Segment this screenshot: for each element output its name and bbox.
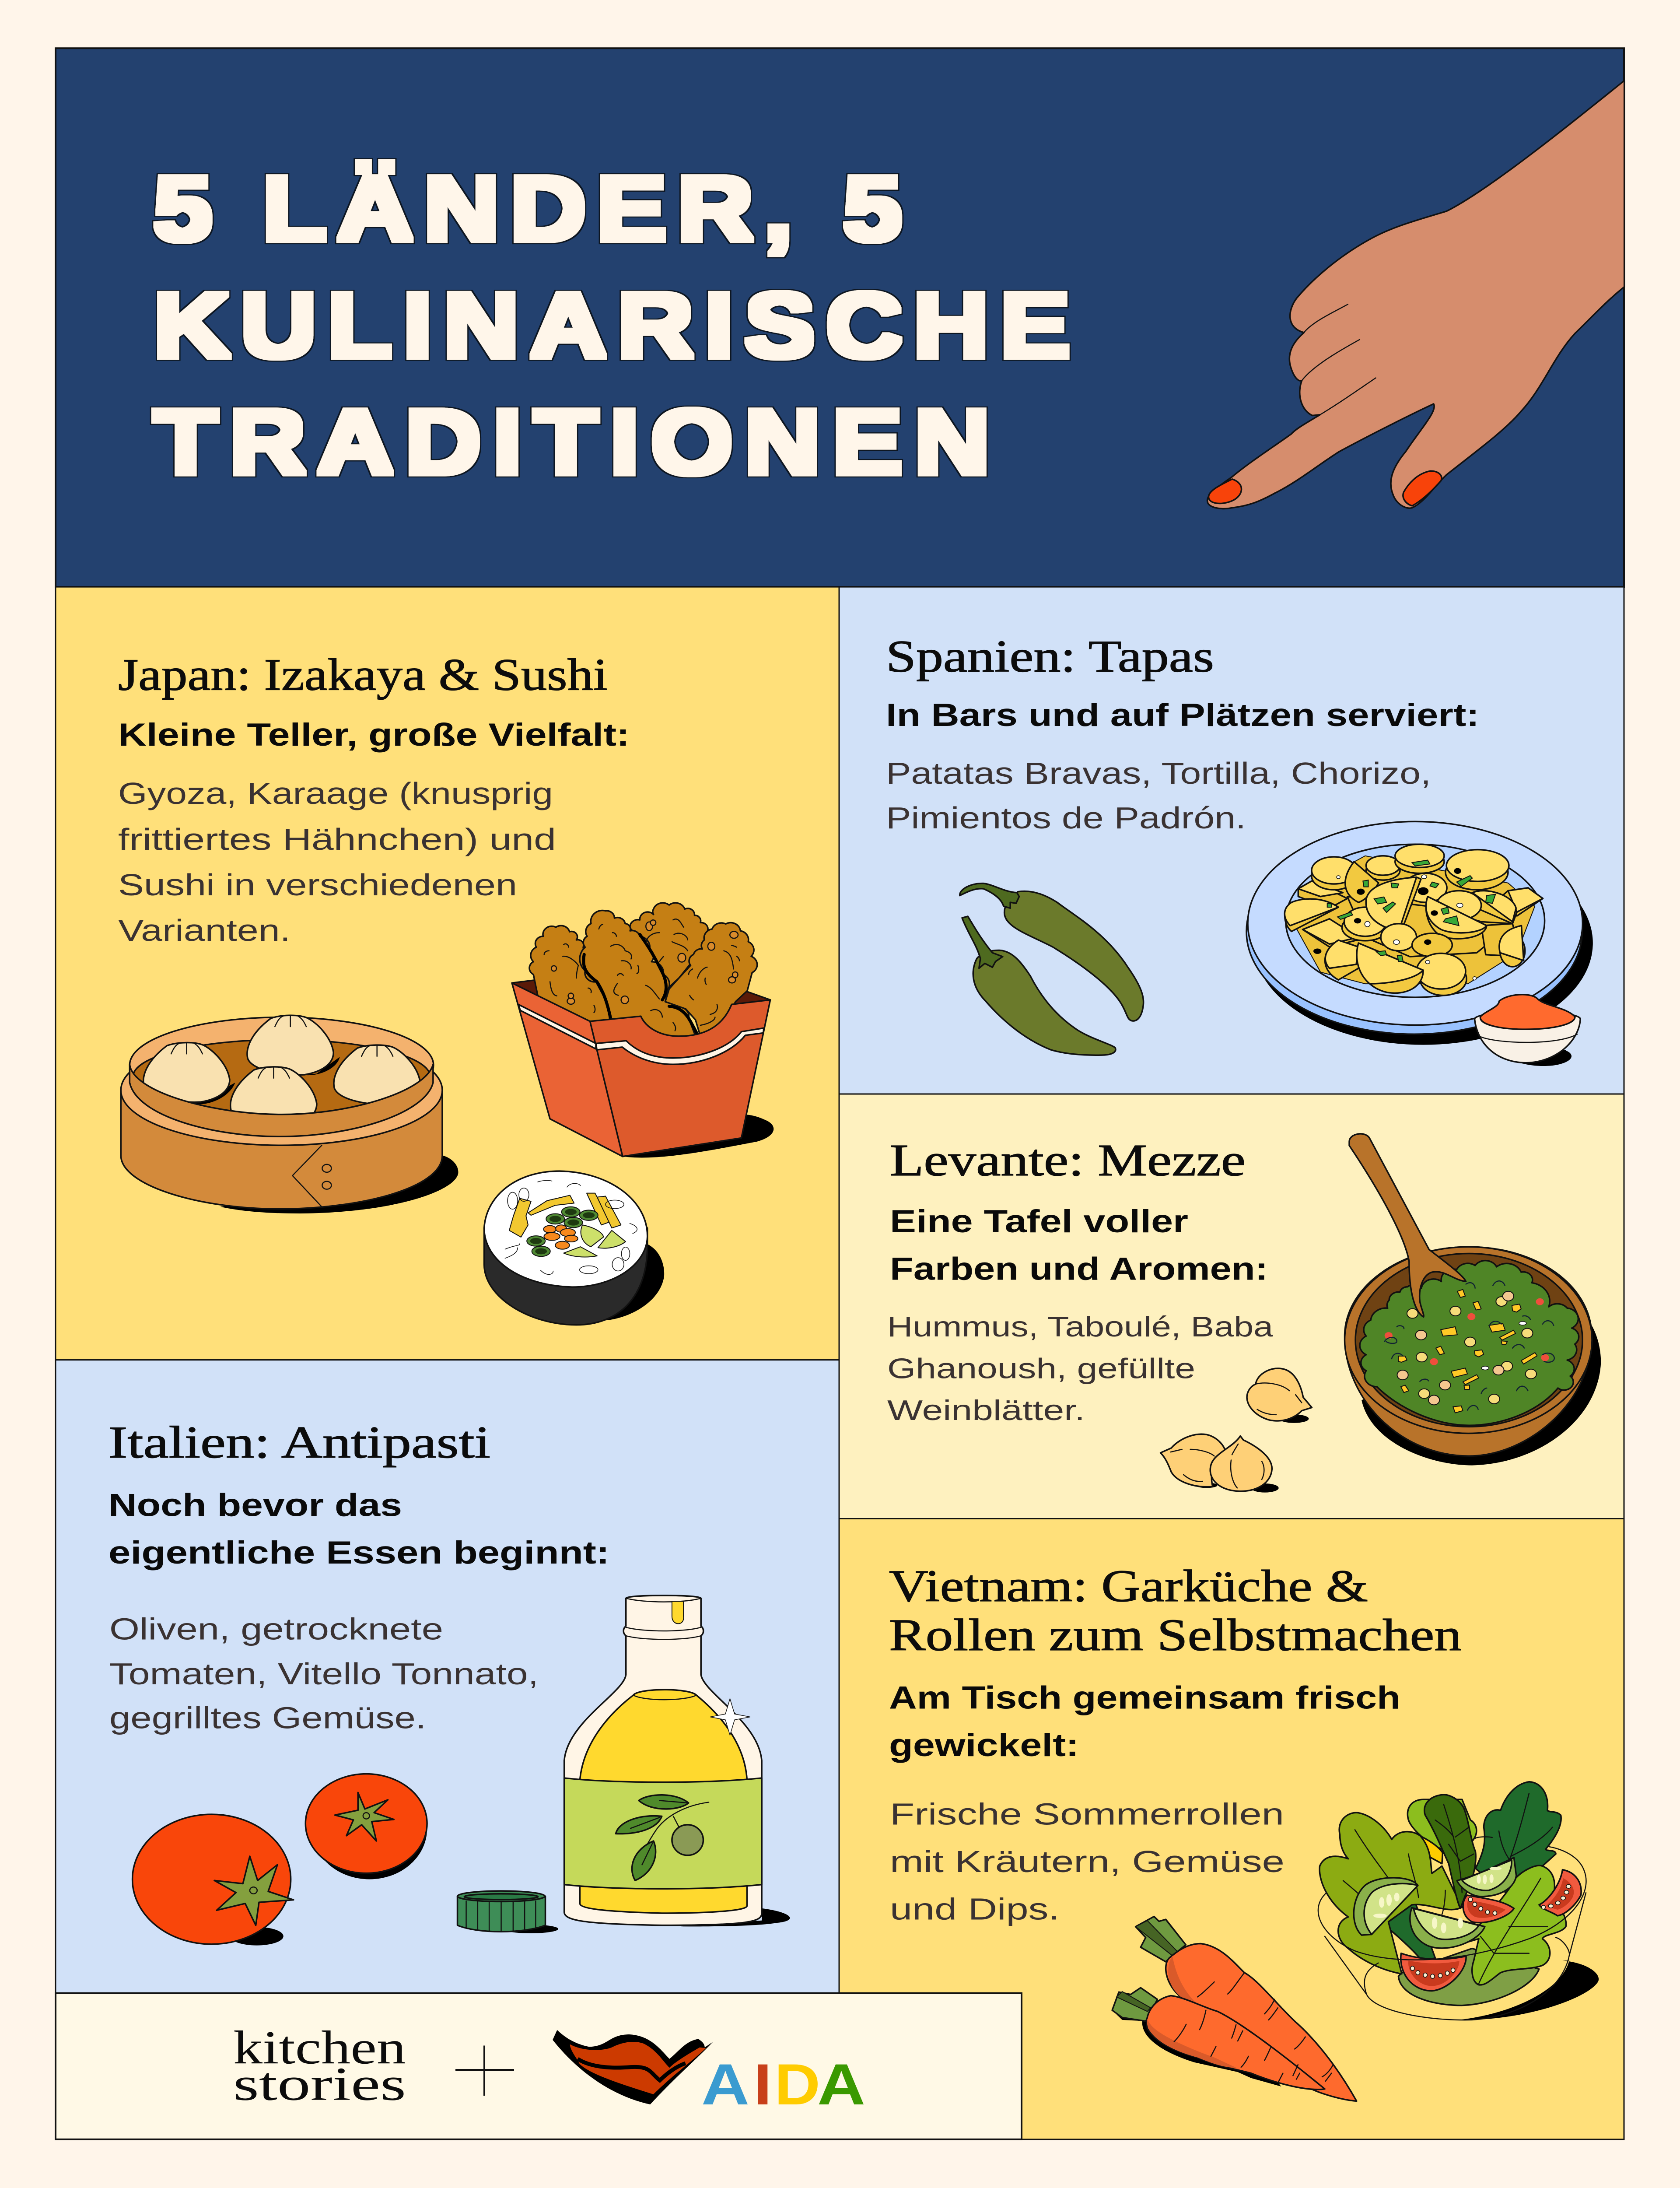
icon: tabbouleh bowl with spoon [1345,1134,1601,1466]
panel: footer logos [56,1993,1022,2139]
icon: salad bowl [1318,1782,1599,2020]
logo: AIDA lips [553,2030,713,2104]
text block: Levante: Hummus, Taboulé, Baba [887,1310,1274,1343]
heading: Japan: Japan: Izakaya & Sushi [118,650,608,700]
text block: Levante [887,1310,1274,1426]
title: TRADITIONEN [154,391,990,493]
text block: Vietnam: und Dips. [890,1892,1060,1926]
panel: Levante [839,1094,1624,1518]
subheading: Levante: Eine Tafel voller [890,1203,1188,1239]
heading: Vietnam: Rollen zum Selbstmachen [889,1610,1462,1660]
icon: chickpeas [1161,1368,1312,1493]
title: 5 LÄNDER, 5 [154,158,902,259]
icon: plus [455,2045,514,2096]
subheading: Levante [890,1203,1268,1287]
icon: carrots [1112,1917,1357,2101]
text block: Spanien: Pimientos de Padrón. [886,801,1246,835]
text block: Japan: frittiertes Hähnchen) und [118,822,556,856]
panel: Vietnam [839,1518,1624,2139]
subheading: Italien [108,1487,609,1571]
heading: Levante: Levante: Mezze [890,1135,1246,1185]
logo: AIDA wordmark: A [817,2052,865,2117]
icon: sushi roll [484,1171,664,1325]
heading: Spanien: Spanien: Tapas [886,631,1214,682]
logo: kitchen stories: kitchen [233,2022,406,2074]
panel: Spanien [839,587,1624,1094]
subheading: Japan: Kleine Teller, große Vielfalt: [118,717,630,753]
panel: Italien [56,1360,839,1994]
text block: Vietnam [890,1797,1284,1926]
panel: Japan [56,587,839,1360]
text block: Spanien: Patatas Bravas, Tortilla, Chorizo, [886,756,1431,790]
text block: Italien [109,1612,539,1735]
subheading: Italien: eigentliche Essen beginnt: [108,1535,609,1571]
heading: Italien: Italien: Antipasti [108,1417,490,1468]
logo: AIDA wordmark: I [753,2052,772,2117]
icon: pointing hand [1208,81,1624,508]
heading: Vietnam: Vietnam: Garküche & [889,1561,1368,1611]
text block: Italien: gegrilltes Gemüse. [109,1701,426,1735]
logo: kitchen stories: stories [233,2058,406,2111]
text block: Japan: Gyoza, Karaage (knusprig [118,776,553,810]
panel: header [56,48,1624,587]
icon: paprika bowl [1474,995,1580,1066]
icon: plate with patatas bravas [1246,821,1593,1045]
text block: Japan [118,776,556,947]
icon: tomatoes [133,1774,427,1946]
subheading: Vietnam [889,1680,1400,1763]
text block: Italien: Oliven, getrocknete [109,1612,443,1646]
icon: olive oil bottle cap [458,1891,558,1933]
text block: Japan: Varianten. [118,913,290,947]
logo: AIDA wordmark: A [701,2052,749,2117]
subheading: Italien: Noch bevor das [108,1487,402,1523]
logo: AIDA wordmark: D [774,2052,820,2117]
icon: karaage box [512,903,774,1157]
text block: Levante: Weinblätter. [887,1394,1085,1426]
icon: padron peppers [960,884,1144,1055]
title: KULINARISCHE [154,274,1070,376]
heading: Vietnam [889,1561,1462,1660]
text block: Italien: Tomaten, Vitello Tonnato, [109,1657,539,1691]
subheading: Levante: Farben und Aromen: [890,1251,1268,1287]
subheading: Spanien: In Bars und auf Plätzen serviert: [886,697,1479,733]
subheading: Vietnam: gewickelt: [889,1727,1079,1763]
text block: Vietnam: mit Kräutern, Gemüse [890,1844,1284,1879]
text block: Spanien [886,756,1431,835]
icon: bamboo steamer with dumplings [121,1015,458,1213]
text block: Japan: Sushi in verschiedenen [118,868,517,902]
logo: kitchen stories [233,2022,406,2111]
icon: olive oil bottle [564,1595,790,1926]
text block: Vietnam: Frische Sommerrollen [890,1797,1284,1831]
subheading: Vietnam: Am Tisch gemeinsam frisch [889,1680,1400,1715]
text block: Levante: Ghanoush, gefüllte [887,1352,1195,1384]
